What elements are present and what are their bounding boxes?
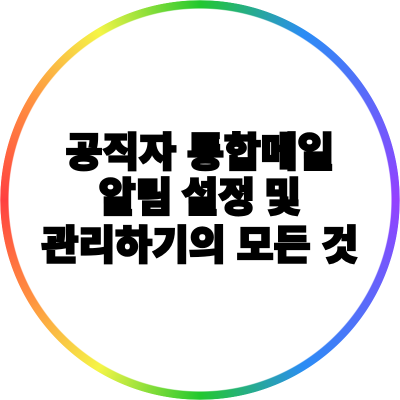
title [41, 131, 358, 268]
title: 공직자 통합메일 [66, 131, 334, 175]
title: 관리하기의 모든 것 [42, 224, 358, 268]
title: 알림 설정 및 [99, 176, 301, 220]
